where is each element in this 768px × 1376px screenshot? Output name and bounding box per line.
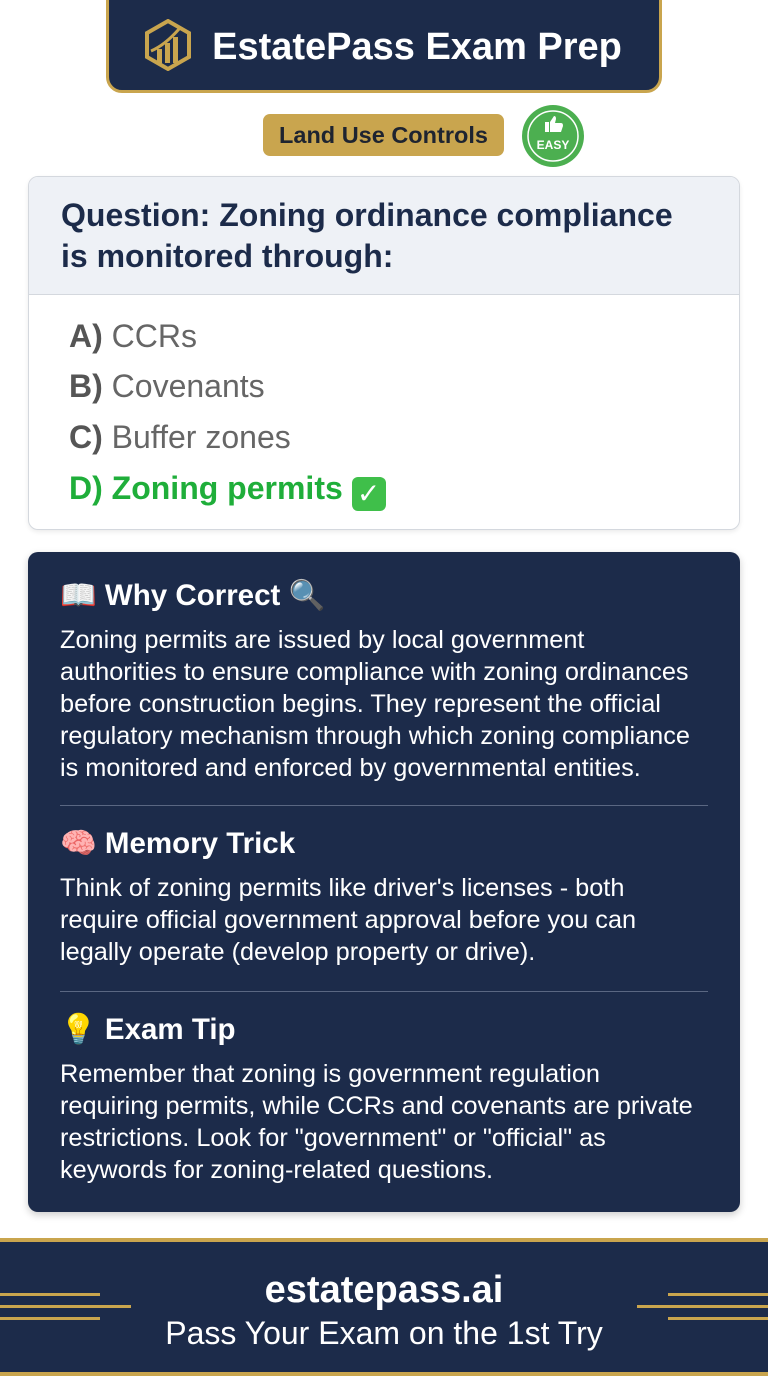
text: why correct: is monitored and enforced by governmental entities.	[60, 754, 641, 782]
text: why correct	[60, 626, 690, 782]
text: why correct: Zoning permits are issued by local government	[60, 626, 584, 654]
option C: C) Buffer zones	[69, 419, 291, 455]
text: memory trick: Think of zoning permits like driver's licenses - both	[60, 874, 624, 902]
explanation panel	[28, 552, 740, 1212]
footer	[0, 1238, 768, 1376]
footer site name: estatepass.ai	[265, 1269, 503, 1311]
text: why correct: regulatory mechanism through which zoning compliance	[60, 722, 690, 750]
heading: memory trick: 🧠 Memory Trick	[60, 827, 295, 860]
option D correct: D) Zoning permits	[69, 470, 343, 506]
tag: topic: Land Use Controls	[279, 122, 488, 148]
footer tagline: Pass Your Exam on the 1st Try	[165, 1315, 603, 1351]
option B: B) Covenants	[69, 368, 265, 404]
text: why correct: authorities to ensure compliance with zoning ordinances	[60, 658, 689, 686]
text: exam tip: restrictions. Look for "government" or "official" as	[60, 1124, 606, 1152]
title: EstatePass Exam Prep	[212, 26, 622, 68]
heading: why correct: 📖 Why Correct 🔍	[60, 579, 325, 612]
question header: is monitored through:	[61, 238, 393, 274]
text: memory trick	[60, 874, 636, 966]
text: memory trick: require official government approval before you can	[60, 906, 636, 934]
option A: A) CCRs	[69, 318, 197, 354]
header banner	[106, 0, 662, 93]
text: exam tip: requiring permits, while CCRs and covenants are private	[60, 1092, 693, 1120]
heading: exam tip: 💡 Exam Tip	[60, 1013, 236, 1046]
option D correct: ✓	[357, 478, 380, 509]
badge: easy	[522, 105, 584, 167]
text: exam tip: Remember that zoning is government regulation	[60, 1060, 600, 1088]
question card	[28, 176, 740, 530]
text: memory trick: legally operate (develop property or drive).	[60, 938, 535, 966]
question header	[29, 177, 739, 295]
tag: topic	[263, 114, 504, 156]
text: why correct: before construction begins. They represent the official	[60, 690, 661, 718]
icon: logo	[145, 19, 191, 71]
text: exam tip: keywords for zoning-related questions.	[60, 1156, 493, 1184]
badge: easy: EASY	[537, 138, 569, 152]
text: exam tip	[60, 1060, 693, 1184]
question header: Question: Zoning ordinance compliance	[61, 197, 673, 233]
